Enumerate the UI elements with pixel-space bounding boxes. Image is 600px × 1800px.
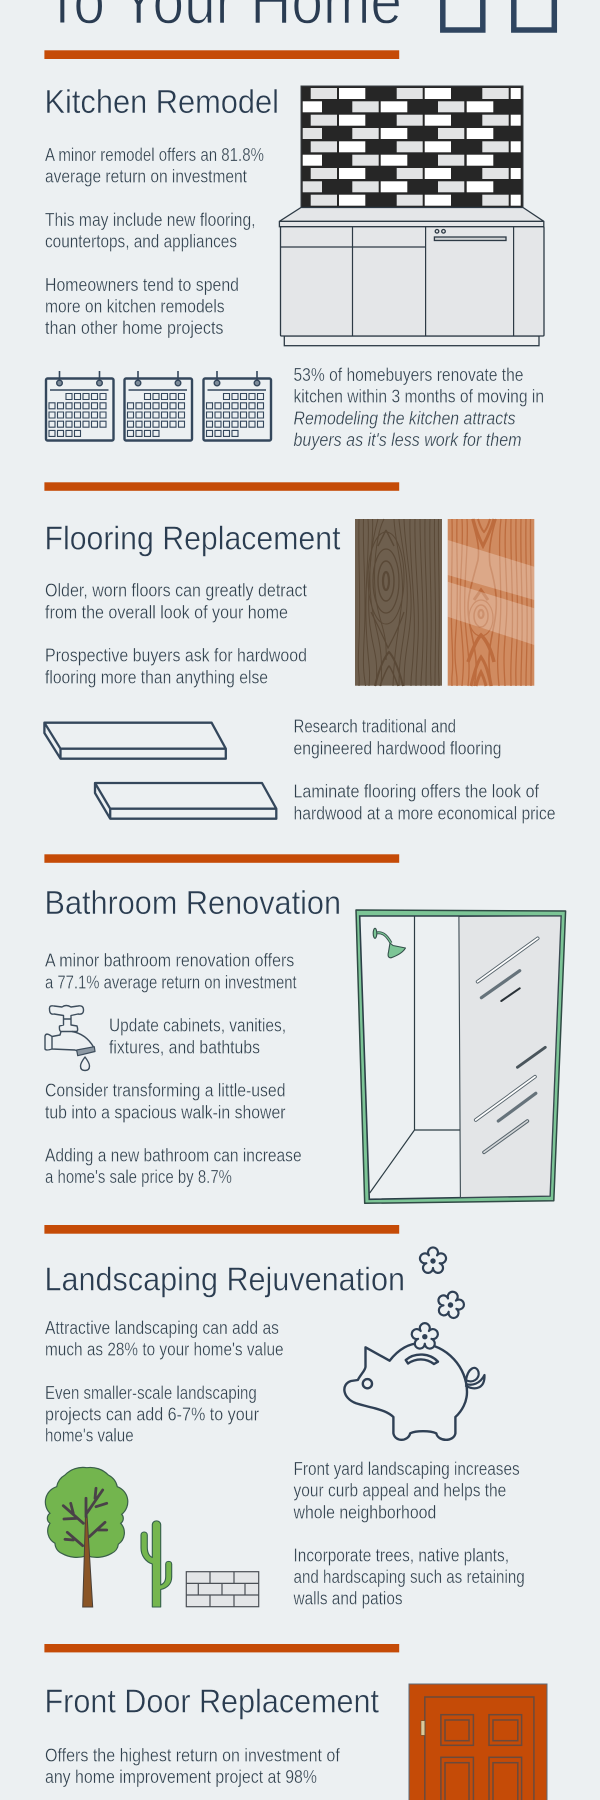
text block: hardscaping: and hardscaping such as retaining: [294, 1567, 525, 1587]
icon: flower: [420, 1247, 446, 1273]
text block: buyers ask for hardwood: Prospective buyers ask for hardwood: [45, 646, 307, 666]
text block: laminate flooring: hardwood at a more economical price: [294, 803, 556, 823]
divider: [44, 50, 399, 59]
illustration: kitchen backsplash and cabinets: [279, 86, 544, 346]
text block: new bathroom value: Adding a new bathroom can increase: [45, 1146, 302, 1166]
panel: front door replacement: [44, 1683, 547, 1800]
text block: minor renovation return: a 77.1% average return on investment: [45, 972, 297, 992]
divider: [44, 1644, 399, 1652]
text block: hardscaping: Incorporate trees, native plants,: [294, 1545, 509, 1565]
text block: laminate flooring: Laminate flooring offers the look of: [294, 782, 540, 802]
text block: worn floors: [45, 581, 307, 622]
icon: flower: [435, 1289, 467, 1320]
text block: homebuyers renovate: 53% of homebuyers renovate the: [294, 365, 524, 385]
text block: spending: than other home projects: [45, 318, 224, 338]
text block: research hardwood: engineered hardwood flooring: [294, 738, 502, 758]
illustration: light wood sample: [448, 519, 534, 686]
text block: buyers ask for hardwood: flooring more than anything else: [45, 667, 268, 687]
text block: landscaping value: Attractive landscaping can add as: [45, 1318, 279, 1338]
icon: tree: [45, 1467, 128, 1607]
text block: worn floors: Older, worn floors can greatly detract: [45, 581, 307, 601]
text block: what it includes: [45, 210, 256, 251]
divider: [44, 482, 399, 491]
text block: landscaping value: [45, 1318, 284, 1359]
text block: hardscaping: [293, 1545, 525, 1609]
heading: front door replacement: Front Door Replacement: [44, 1683, 379, 1720]
text block: smaller projects: home's value: [45, 1426, 134, 1446]
illustration: front door: [409, 1684, 547, 1800]
text block: minor remodel return: average return on investment: [45, 166, 247, 186]
text block: homebuyers renovate: Remodeling the kitchen attracts: [294, 408, 516, 428]
text block: spending: Homeowners tend to spend: [45, 275, 239, 295]
text block: curb appeal: your curb appeal and helps the: [294, 1481, 506, 1501]
text block: research hardwood: [294, 717, 502, 758]
divider: [44, 1225, 399, 1234]
text block: laminate flooring: [294, 782, 556, 823]
text block: new bathroom value: a home's sale price by 8.7%: [45, 1167, 232, 1187]
illustration: walk-in shower: [356, 910, 566, 1203]
text block: research hardwood: Research traditional and: [294, 717, 456, 737]
heading: bathroom renovation: Bathroom Renovation: [44, 884, 341, 921]
heading: landscaping rejuvenation: Landscaping Rejuvenation: [44, 1261, 405, 1298]
text block: homebuyers renovate: buyers as it's less work for them: [294, 430, 522, 450]
icon: piggy bank: [344, 1323, 485, 1440]
heading: kitchen remodel: Kitchen Remodel: [44, 83, 279, 120]
text block: smaller projects: Even smaller-scale landscaping: [45, 1383, 257, 1403]
icon: calendars: [46, 371, 271, 440]
text block: worn floors: from the overall look of your home: [45, 602, 288, 622]
text block: minor renovation return: A minor bathroom renovation offers: [45, 951, 294, 971]
illustration: dark wood sample: [355, 519, 442, 686]
text block: minor renovation return: [45, 951, 297, 992]
text block: highest return: Offers the highest return on investment of: [45, 1746, 341, 1766]
text block: curb appeal: [293, 1459, 520, 1522]
text block: curb appeal: Front yard landscaping increases: [294, 1459, 520, 1479]
icon: floorboard: [44, 723, 226, 759]
text block: walk-in shower: Consider transforming a little-used: [45, 1081, 286, 1101]
text block: highest return: [45, 1746, 341, 1787]
text block: homebuyers renovate: [294, 365, 544, 450]
text block: homebuyers renovate: kitchen within 3 months of moving in: [294, 387, 544, 407]
icon: faucet: [45, 1006, 95, 1070]
icon: brick wall: [186, 1572, 259, 1607]
text block: what it includes: countertops, and appliances: [45, 231, 237, 251]
text block: highest return: any home improvement project at 98%: [45, 1767, 317, 1787]
text block: curb appeal: whole neighborhood: [293, 1502, 436, 1522]
icon: floorboard: [95, 783, 276, 819]
text block: minor remodel return: A minor remodel offers an 81.8%: [45, 145, 264, 165]
text block: update fixtures: Update cabinets, vanities,: [109, 1016, 286, 1036]
text block: new bathroom value: [45, 1146, 302, 1187]
text block: smaller projects: [45, 1383, 259, 1446]
text block: buyers ask for hardwood: [45, 646, 307, 687]
text block: walk-in shower: [45, 1081, 286, 1122]
text block: smaller projects: projects can add 6-7% to your: [45, 1404, 259, 1424]
text block: spending: more on kitchen remodels: [45, 296, 225, 316]
panel: flooring replacement: [44, 519, 556, 823]
text block: landscaping value: much as 28% to your home's value: [45, 1339, 284, 1359]
text block: update fixtures: [109, 1016, 286, 1057]
panel: kitchen remodel: [44, 83, 544, 450]
text block: walk-in shower: tub into a spacious walk-in shower: [45, 1102, 286, 1122]
text block: spending: [45, 275, 239, 338]
divider: [44, 854, 399, 863]
icon: cactus: [141, 1521, 172, 1607]
panel: bathroom renovation: [44, 884, 566, 1203]
text block: minor remodel return: [45, 145, 264, 186]
text block: update fixtures: fixtures, and bathtubs: [109, 1037, 260, 1057]
text block: what it includes: This may include new flooring,: [45, 210, 256, 230]
heading: flooring replacement: Flooring Replacement: [44, 519, 340, 556]
panel: landscaping rejuvenation: [44, 1247, 525, 1609]
icon: house windows: [443, 0, 554, 30]
text block: hardscaping: walls and patios: [293, 1589, 402, 1609]
